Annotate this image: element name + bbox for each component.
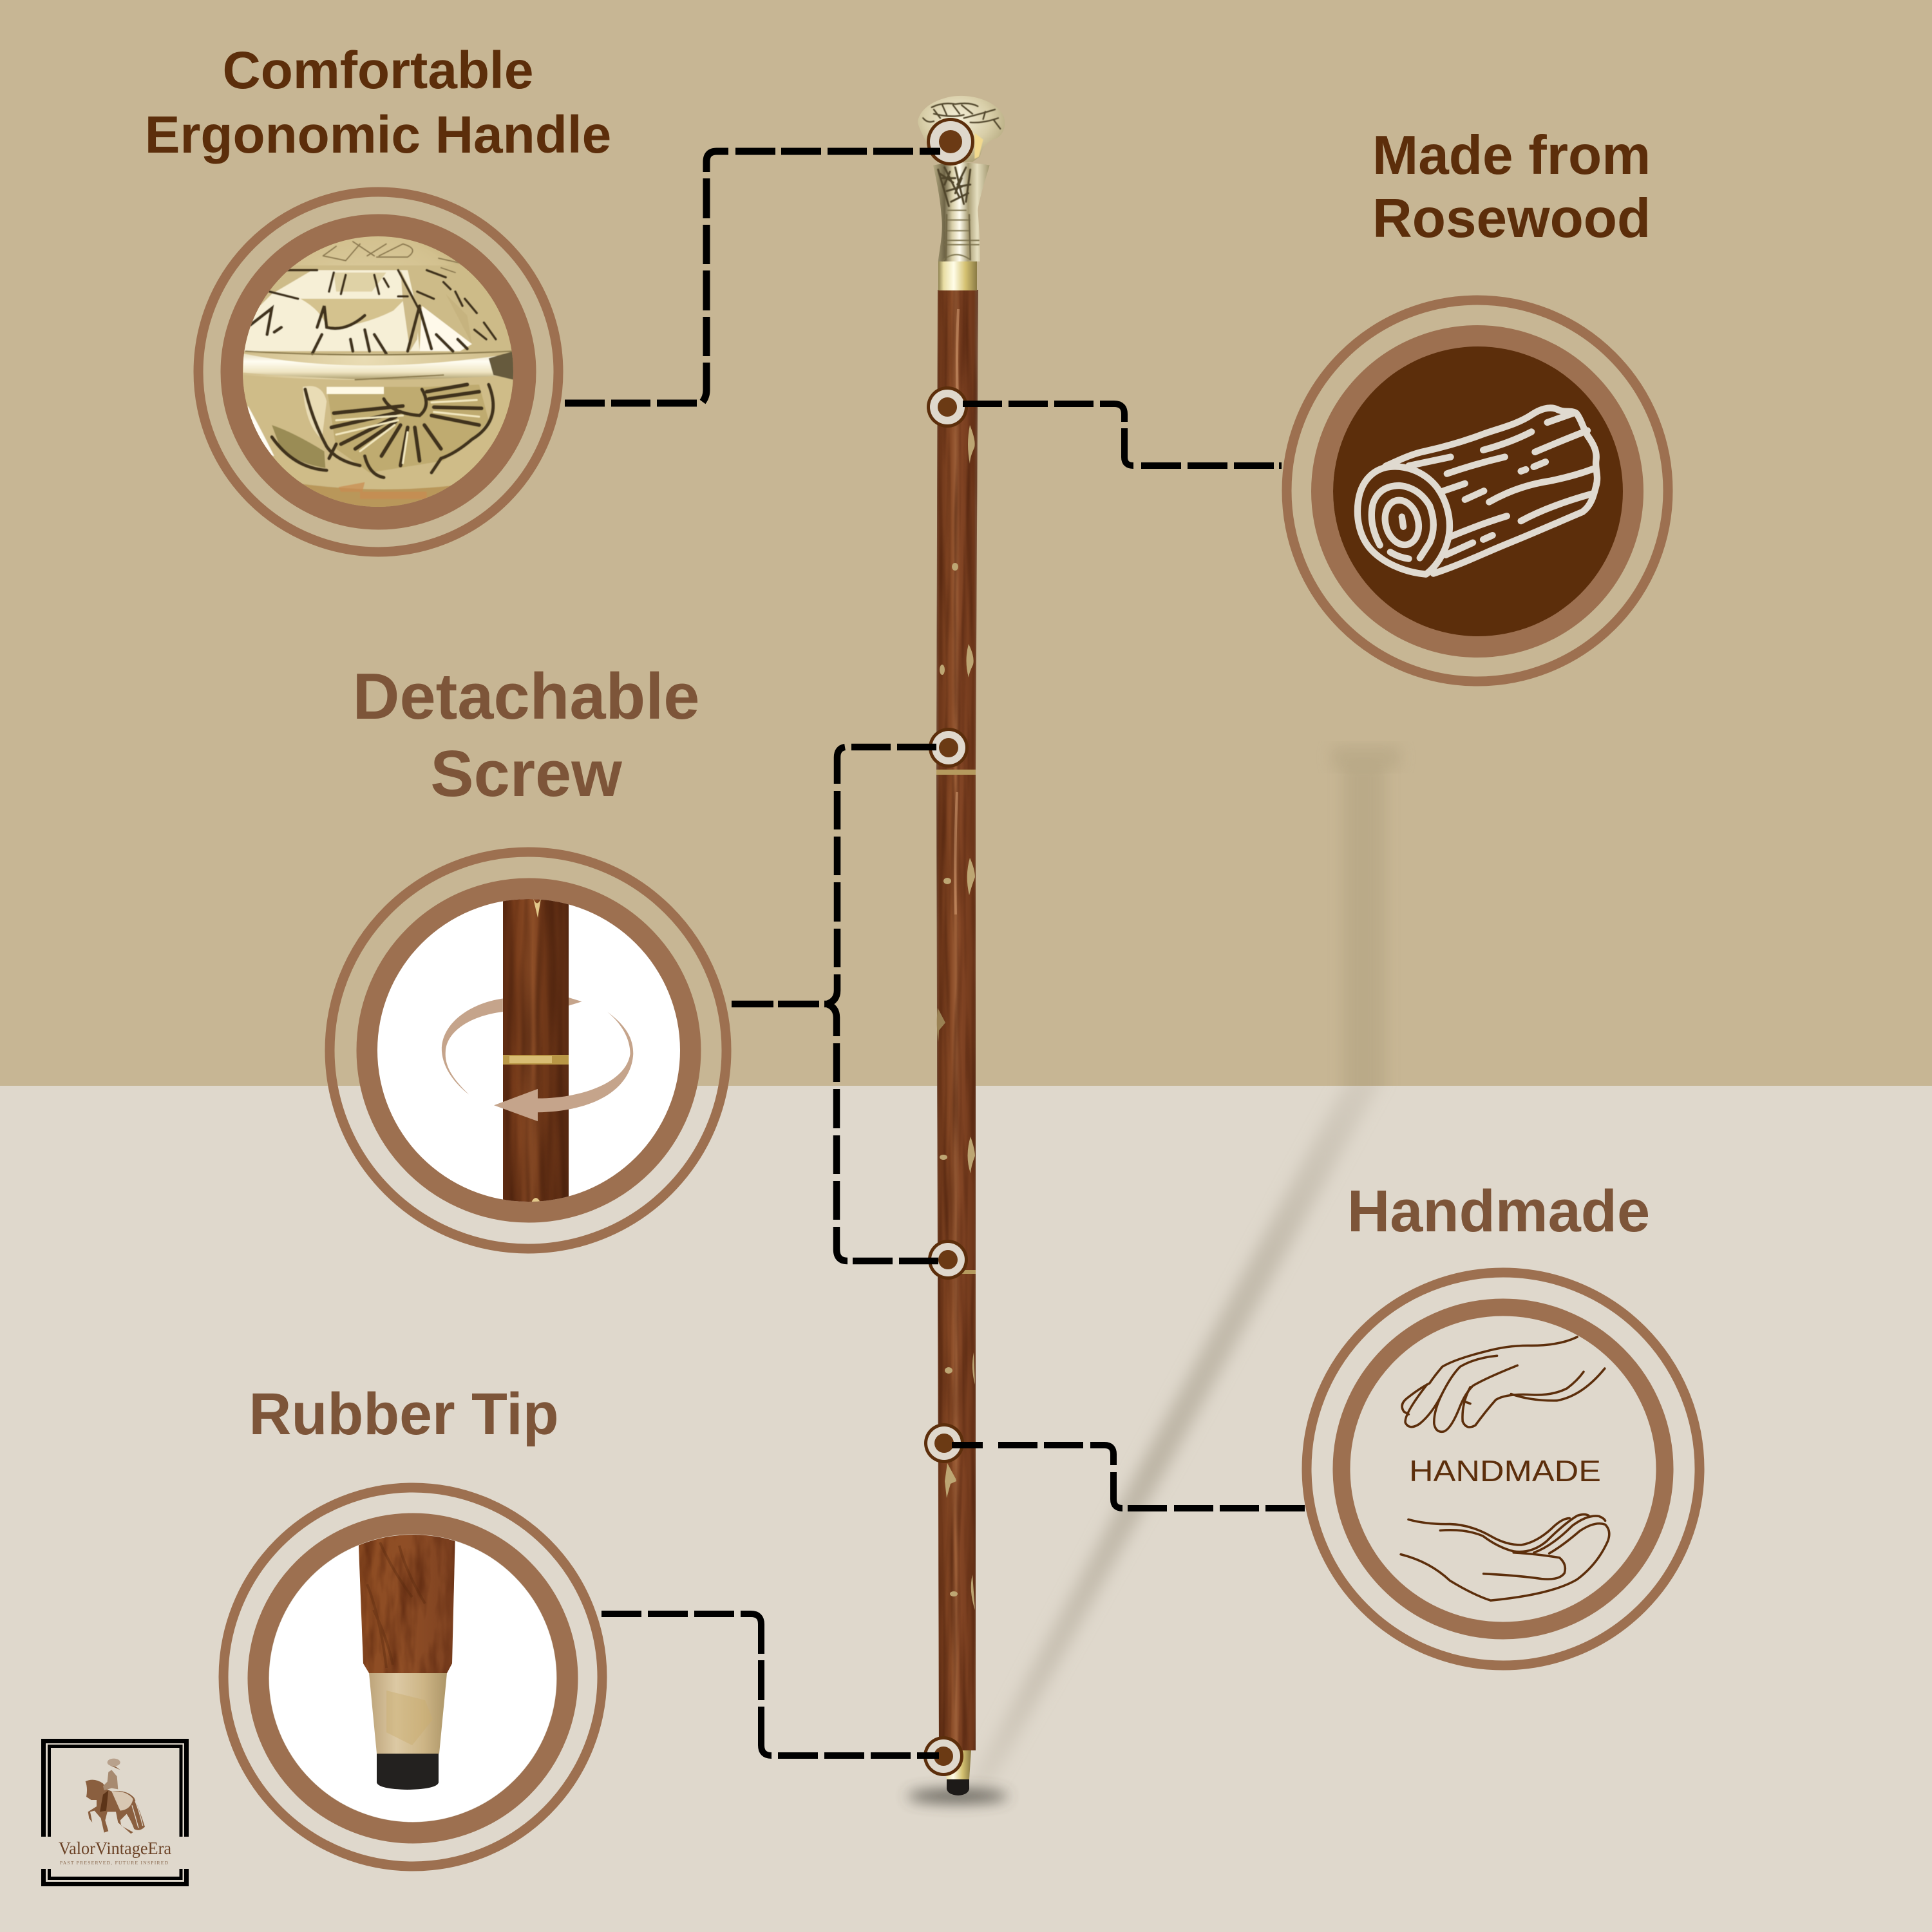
- panel: detachable screw close-up: [330, 852, 726, 1249]
- brass inlays: [936, 425, 976, 1610]
- marker: rosewood: [927, 386, 968, 428]
- heading: comfortable ergonomic handle: Comfortable: [223, 41, 533, 100]
- panel: rubber tip close-up: [223, 1488, 602, 1866]
- marker: rubber tip: [923, 1736, 963, 1776]
- heading: detachable screw: Detachable: [353, 661, 699, 733]
- heading: made from rosewood: Rosewood: [1372, 188, 1651, 249]
- icon: upper hand: [1402, 1337, 1605, 1432]
- logo wordmark: ValorVintageEra: [59, 1839, 171, 1858]
- connector: handle: [565, 151, 940, 403]
- rubber foot: [947, 1779, 969, 1795]
- heading: comfortable ergonomic handle: Ergonomic Handle: [145, 106, 611, 164]
- logo horse and rider: [86, 1759, 145, 1833]
- cane cast shadow: [907, 746, 1400, 1803]
- connector: rubber tip: [601, 1614, 939, 1756]
- walking stick: [918, 96, 1005, 1795]
- stick tip rubber: [377, 1754, 439, 1790]
- logo: ValorVintageEra: [44, 1741, 187, 1884]
- stick section with joint: [503, 889, 569, 1211]
- heading: detachable screw: [353, 661, 699, 810]
- panel: handle close-up: [198, 192, 558, 552]
- marker: screw lower: [928, 1240, 968, 1280]
- connector: handmade: [952, 1445, 1305, 1508]
- rotation arrow: front arc: [494, 1012, 633, 1121]
- stick shaft: [936, 290, 978, 1750]
- marker: screw upper: [929, 728, 969, 768]
- marker: handmade: [924, 1423, 964, 1463]
- heading: made from rosewood: [1372, 125, 1651, 249]
- label: handmade stamp: HANDMADE: [1409, 1454, 1601, 1488]
- heading: detachable screw: Screw: [430, 738, 622, 810]
- metal handle: [918, 96, 1005, 261]
- heading: rubber tip: Rubber Tip: [249, 1381, 559, 1447]
- heading: made from rosewood: Made from: [1372, 125, 1651, 186]
- stick tip ferrule: [369, 1673, 447, 1754]
- stick tip wood: [358, 1530, 455, 1673]
- panel: rosewood icon: [1287, 300, 1668, 681]
- panel: handmade icon: [1307, 1273, 1700, 1665]
- icon: log: [1358, 408, 1597, 574]
- brass ferrule: [942, 1750, 971, 1779]
- photo: engraved brass ball: [241, 235, 527, 511]
- heading: handmade: Handmade: [1347, 1179, 1650, 1244]
- icon: lower hand: [1401, 1515, 1609, 1600]
- connector: rosewood: [963, 404, 1282, 466]
- heading: comfortable ergonomic handle: [145, 41, 611, 164]
- brass collar: [938, 260, 977, 290]
- marker: handle: [927, 118, 974, 166]
- logo frame: [44, 1741, 187, 1884]
- connector: detachable screw bracket: [732, 747, 938, 1261]
- rotation arrow: back arc: [442, 998, 582, 1095]
- logo tagline: PAST PRESERVED, FUTURE INSPIRED: [60, 1860, 169, 1866]
